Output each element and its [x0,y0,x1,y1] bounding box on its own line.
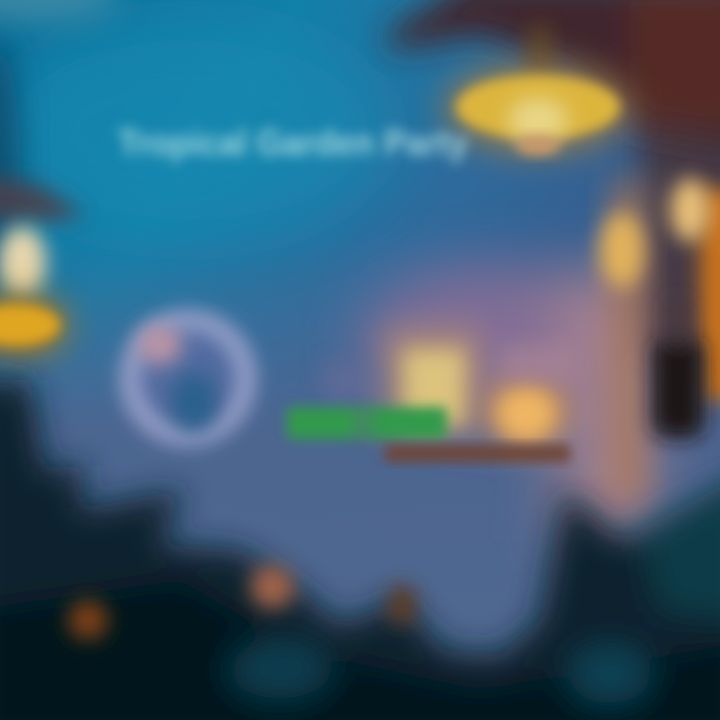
glowing jars on shelf [385,330,575,448]
dark right edge [640,110,720,350]
roof beams top right [385,0,720,150]
title: blurred text: Tropical Garden Party [118,122,468,163]
ring chart icon [128,318,248,438]
orange flowers in foliage [68,565,416,640]
dark lantern on right [652,300,704,438]
wooden shelf [385,445,570,462]
left lantern [0,175,85,355]
foliage: bottom dark plants [0,380,720,720]
grey small box above green bar [322,362,388,402]
hanging lamp top right [443,25,633,156]
green progress bar [287,407,447,439]
pink glow on right wall [360,265,650,540]
right glowing lights [600,178,720,500]
